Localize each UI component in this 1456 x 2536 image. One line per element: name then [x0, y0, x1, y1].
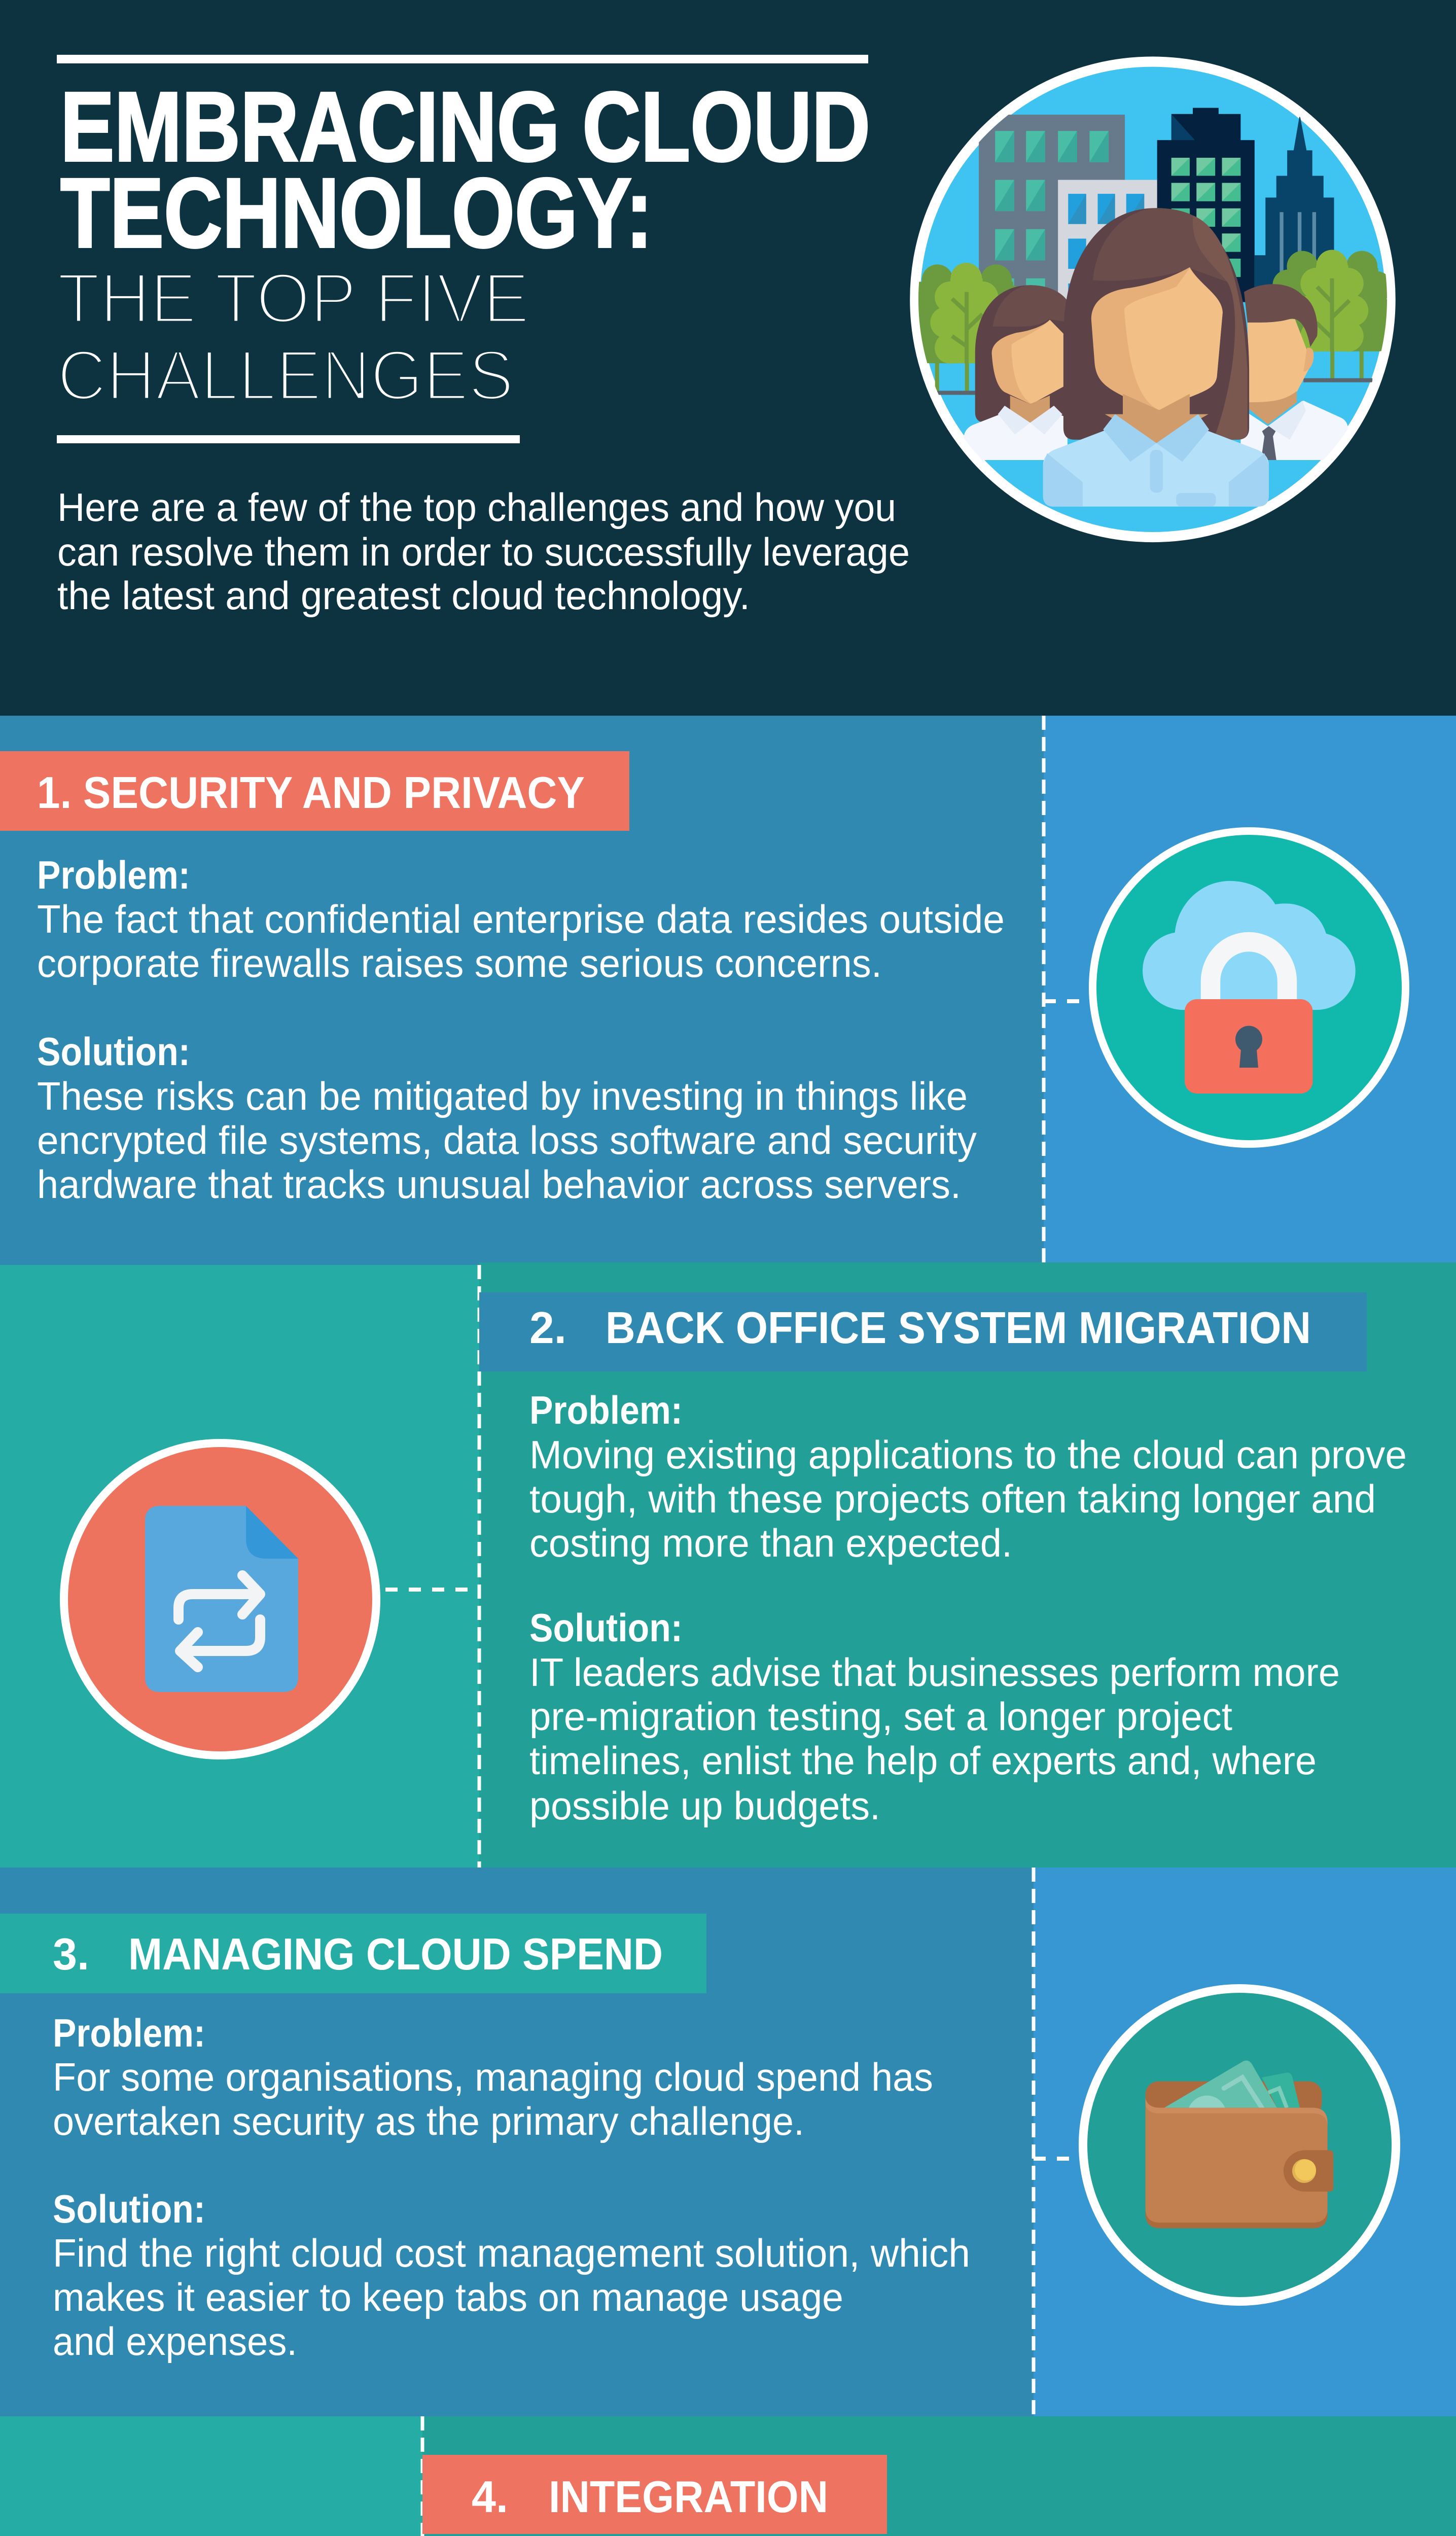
- text block: problem and solution: [37, 853, 1005, 1207]
- header panel: [57, 55, 1395, 618]
- title: THE TOP FIVE: [57, 258, 529, 338]
- intro text: the latest and greatest cloud technology.: [57, 573, 750, 618]
- text block: problem and solution: Solution:: [37, 1029, 190, 1074]
- heading: [0, 751, 629, 831]
- text block: problem and solution: Problem:: [529, 1388, 683, 1432]
- text block: problem and solution: costing more than expected.: [529, 1521, 1012, 1565]
- title: TECHNOLOGY:: [60, 158, 653, 268]
- text block: problem and solution: For some organisations, managing cloud spend has: [53, 2055, 933, 2099]
- text block: problem and solution: pre-migration testing, set a longer project: [529, 1694, 1232, 1739]
- heading: [422, 2455, 887, 2534]
- person: left woman: [964, 285, 1069, 460]
- text block: problem and solution: Solution:: [53, 2187, 205, 2231]
- text block: problem and solution: corporate firewalls raises some serious concerns.: [37, 941, 882, 985]
- heading: 2.: [529, 1302, 566, 1353]
- heading: 1. SECURITY AND PRIVACY: [37, 767, 585, 818]
- heading: [0, 1914, 706, 1993]
- text block: problem and solution: Problem:: [53, 2011, 205, 2055]
- intro text: [57, 485, 910, 618]
- icon: cloud padlock: [1092, 831, 1406, 1144]
- heading: INTEGRATION: [549, 2472, 828, 2522]
- text block: problem and solution: These risks can be mitigated by investing in things like: [37, 1074, 968, 1118]
- text block: problem and solution: encrypted file systems, data loss software and security: [37, 1118, 977, 1163]
- panel: 3 managing cloud spend: [0, 1868, 1456, 2416]
- intro text: Here are a few of the top challenges and how you: [57, 485, 896, 530]
- text block: problem and solution: [53, 2011, 970, 2364]
- text block: problem and solution: hardware that tracks unusual behavior across servers.: [37, 1162, 961, 1207]
- title: [57, 72, 870, 415]
- person: right man: [1240, 284, 1348, 460]
- heading: MANAGING CLOUD SPEND: [128, 1929, 663, 1979]
- panel: 1 security and privacy: [0, 716, 1456, 1265]
- icon: file sync: [64, 1443, 376, 1755]
- panel: 2 back office system migration: [0, 1262, 1456, 1868]
- title: EMBRACING CLOUD: [60, 72, 870, 182]
- trees left: [918, 263, 1027, 395]
- text block: problem and solution: Problem:: [37, 853, 190, 897]
- heading: 3.: [53, 1929, 89, 1979]
- text block: problem and solution: Solution:: [529, 1605, 683, 1650]
- text block: problem and solution: overtaken security as the primary challenge.: [53, 2099, 804, 2143]
- heading: BACK OFFICE SYSTEM MIGRATION: [606, 1302, 1311, 1353]
- person: central woman: [1043, 208, 1269, 507]
- text block: problem and solution: [529, 1388, 1407, 1828]
- text block: problem and solution: Moving existing applications to the cloud can prove: [529, 1432, 1407, 1477]
- text block: problem and solution: possible up budgets.: [529, 1783, 880, 1828]
- text block: problem and solution: The fact that confidential enterprise data resides outside: [37, 897, 1005, 941]
- icon: business team in city circle: [915, 62, 1395, 537]
- trees right: [1272, 250, 1395, 382]
- text block: problem and solution: timelines, enlist the help of experts and, where: [529, 1738, 1317, 1783]
- panel: 4 integration: [0, 2416, 1456, 2536]
- text block: problem and solution: Find the right cloud cost management solution, which: [53, 2231, 970, 2275]
- text block: problem and solution: makes it easier to keep tabs on manage usage: [53, 2275, 843, 2319]
- icon: wallet: [1083, 1988, 1396, 2302]
- text block: problem and solution: tough, with these projects often taking longer and: [529, 1476, 1376, 1521]
- intro text: can resolve them in order to successfully leverage: [57, 530, 910, 574]
- heading: [479, 1292, 1367, 1371]
- text block: problem and solution: and expenses.: [53, 2319, 297, 2364]
- title: CHALLENGES: [57, 335, 514, 415]
- heading: 4.: [472, 2472, 508, 2522]
- text block: problem and solution: IT leaders advise that businesses perform more: [529, 1650, 1340, 1695]
